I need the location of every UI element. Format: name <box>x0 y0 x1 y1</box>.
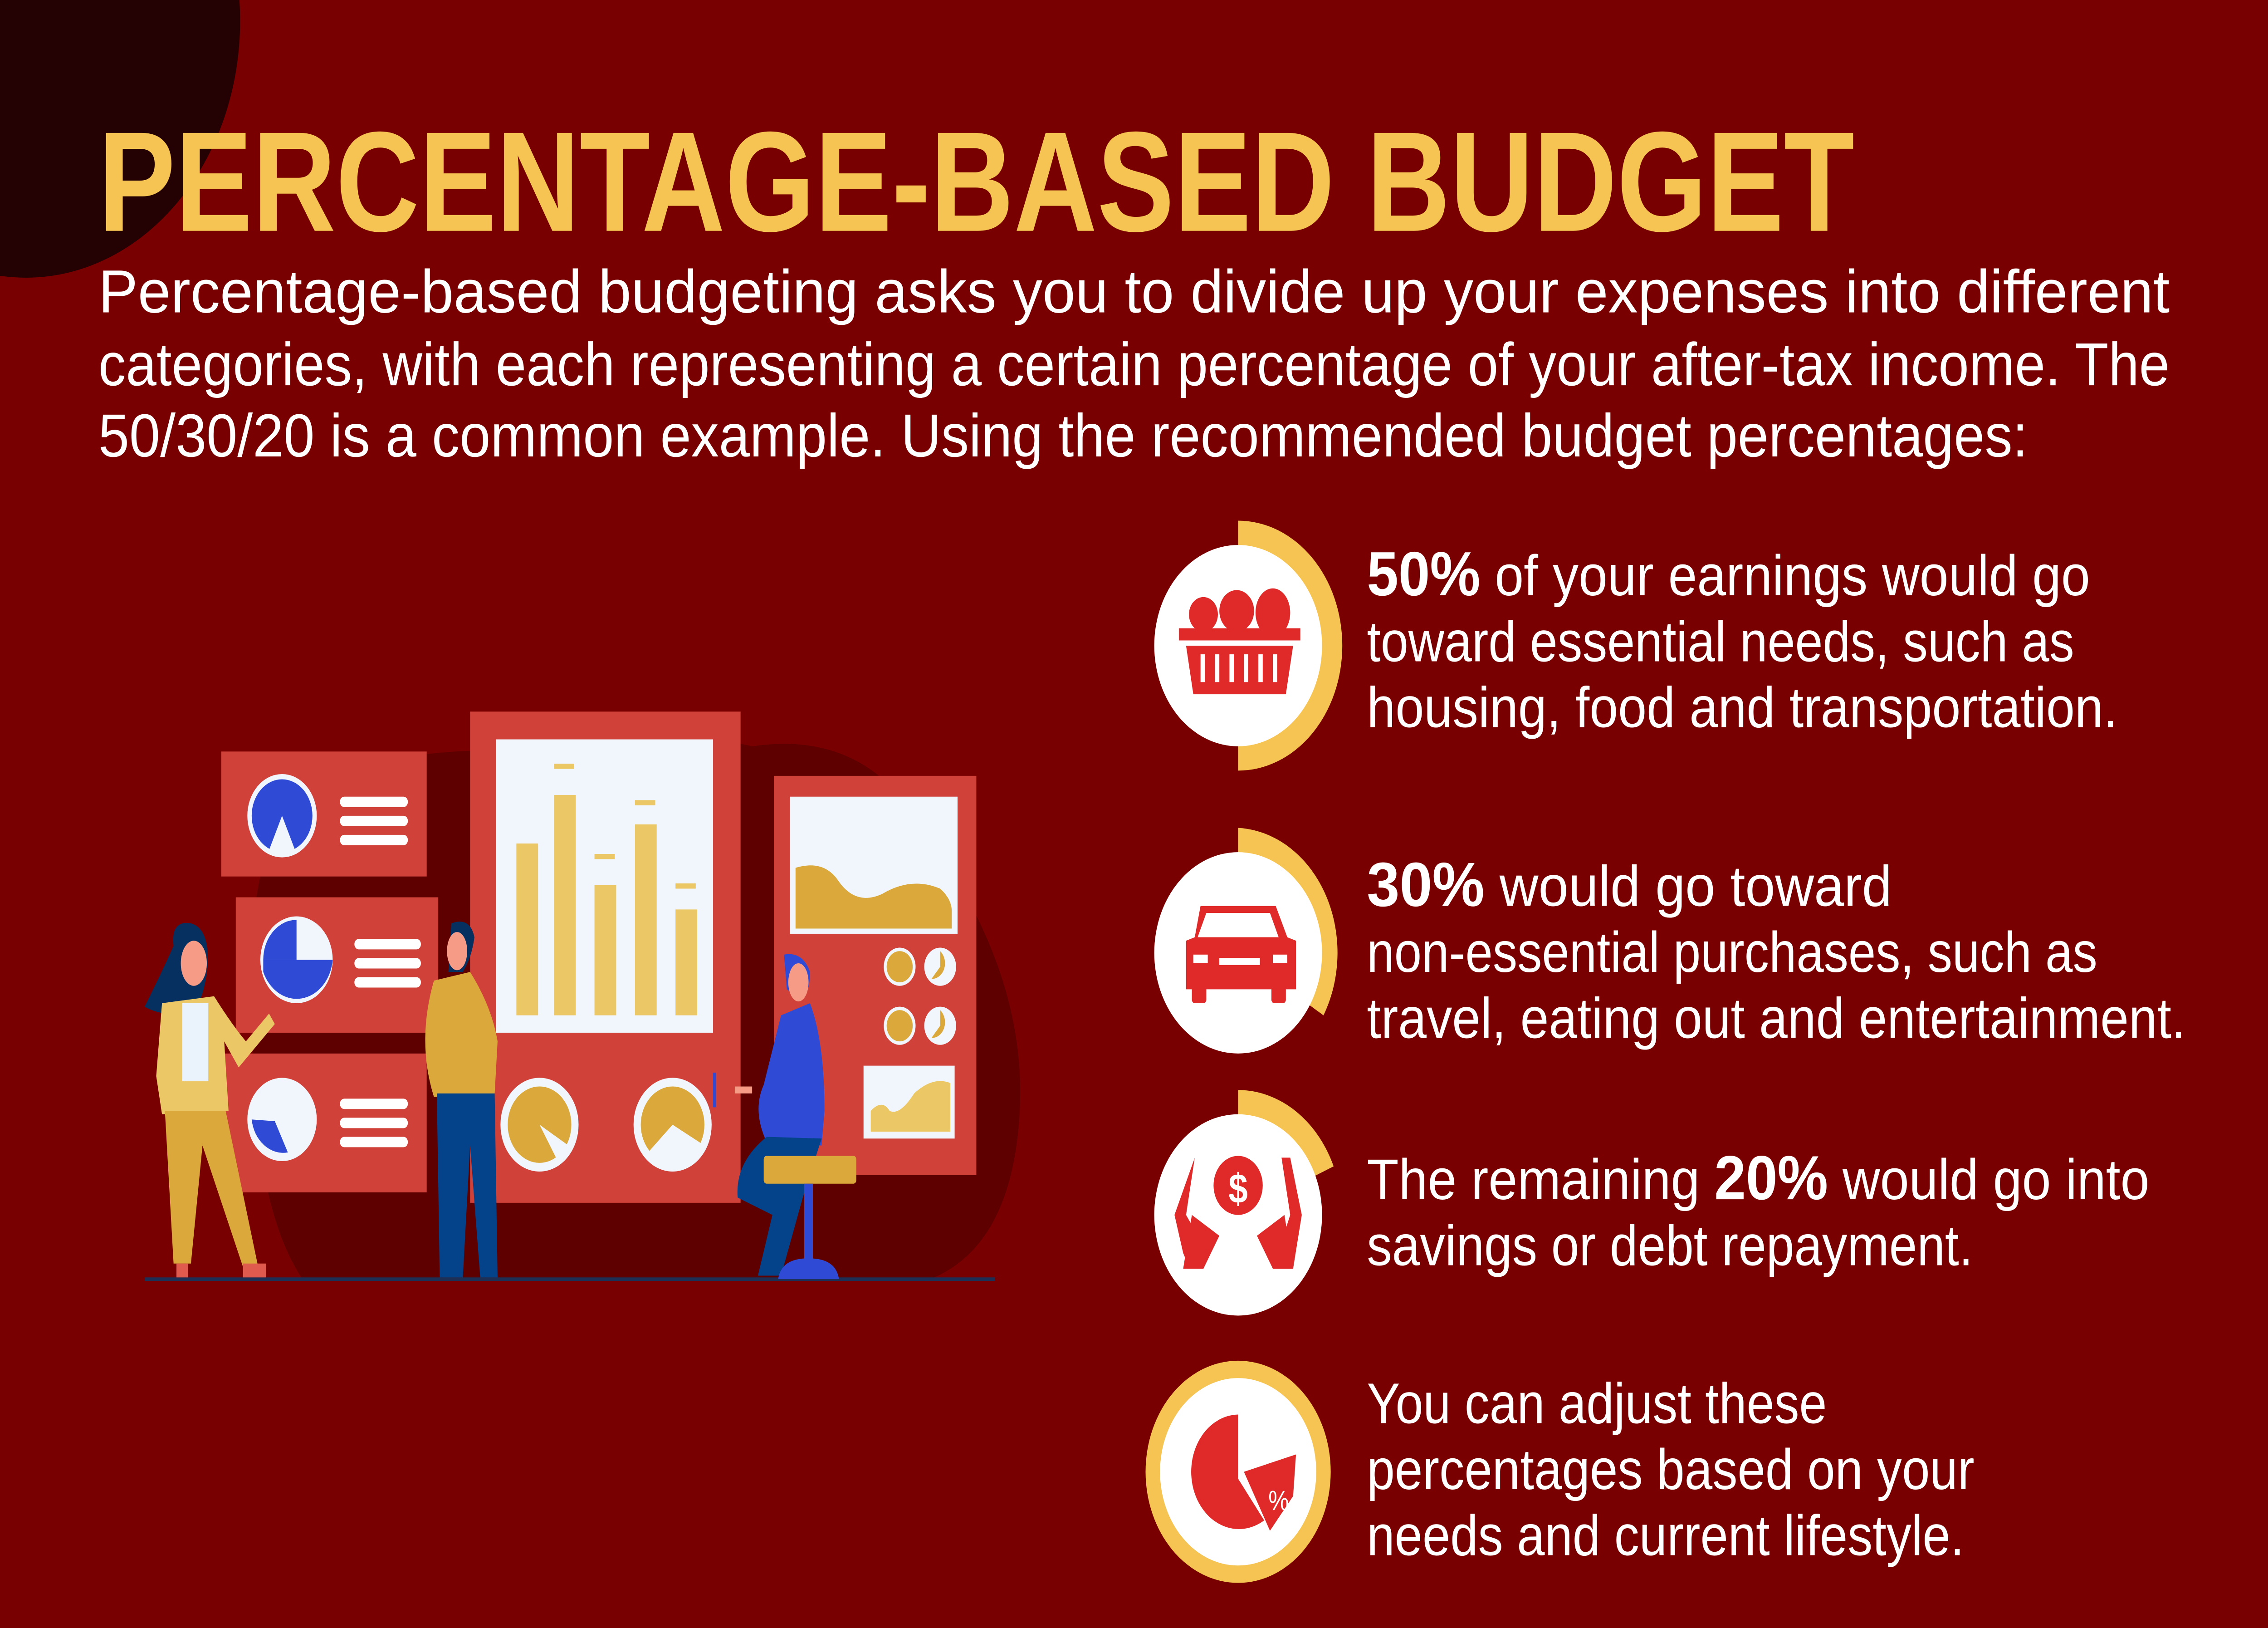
intro paragraph: 50/30/20 is a common example. Using the recommended budget percentages: <box>98 402 2028 470</box>
text: 50%: 50% of your earnings would go <box>1367 539 2090 608</box>
panel: middle-left pie <box>236 897 438 1033</box>
icon: hands with coin <box>1154 1090 1334 1315</box>
intro paragraph: categories, with each representing a certain percentage of your after-tax income. The <box>98 331 2170 399</box>
seated man figure <box>713 954 825 1275</box>
item: 50% essential needs <box>1154 521 2117 770</box>
floor line <box>145 1277 995 1281</box>
text: 20% <box>1367 1143 2150 1278</box>
intro paragraph <box>98 258 2170 470</box>
panel: right charts <box>774 776 976 1175</box>
icon: basket <box>1154 521 1342 770</box>
decorative corner circle <box>0 0 240 278</box>
text: 30% <box>1367 849 2185 1050</box>
panel: central bar chart <box>470 711 741 1203</box>
icon: car <box>1154 828 1338 1054</box>
text: adjust: needs and current lifestyle. <box>1367 1503 1964 1567</box>
text: 50%: housing, food and transportation. <box>1367 676 2117 740</box>
text: 20%: The remaining 20% would go into <box>1367 1143 2150 1213</box>
text: 30%: travel, eating out and entertainment. <box>1367 986 2185 1050</box>
text: adjust: You can adjust these <box>1367 1372 1827 1436</box>
woman figure <box>145 923 275 1277</box>
icon: hands with coin: $ <box>1228 1165 1248 1211</box>
standing man figure <box>425 922 498 1277</box>
panel: bottom-left pie <box>221 1054 427 1192</box>
text: 20%: savings or debt repayment. <box>1367 1213 1973 1278</box>
stool <box>764 1156 856 1279</box>
icon: pie chart: % <box>1268 1485 1289 1516</box>
text: adjust <box>1367 1372 1975 1567</box>
background blob <box>252 740 1020 1281</box>
illustration: budget presentation <box>145 711 1020 1281</box>
icon: pie chart <box>1146 1361 1331 1583</box>
text: 30%: non-essential purchases, such as <box>1367 920 2097 984</box>
item: 20% savings <box>1154 1090 2150 1315</box>
item: adjust percentages <box>1146 1361 1975 1583</box>
intro paragraph: Percentage-based budgeting asks you to divide up your expenses into different <box>98 258 2170 326</box>
text: 50% <box>1367 539 2117 740</box>
text: 30%: 30% would go toward <box>1367 849 1892 919</box>
text: 50%: toward essential needs, such as <box>1367 609 2074 674</box>
panel: top-left pie <box>221 751 427 877</box>
title: PERCENTAGE-BASED BUDGET <box>98 103 1854 261</box>
item: 30% non-essential <box>1154 828 2185 1054</box>
text: adjust: percentages based on your <box>1367 1437 1975 1501</box>
